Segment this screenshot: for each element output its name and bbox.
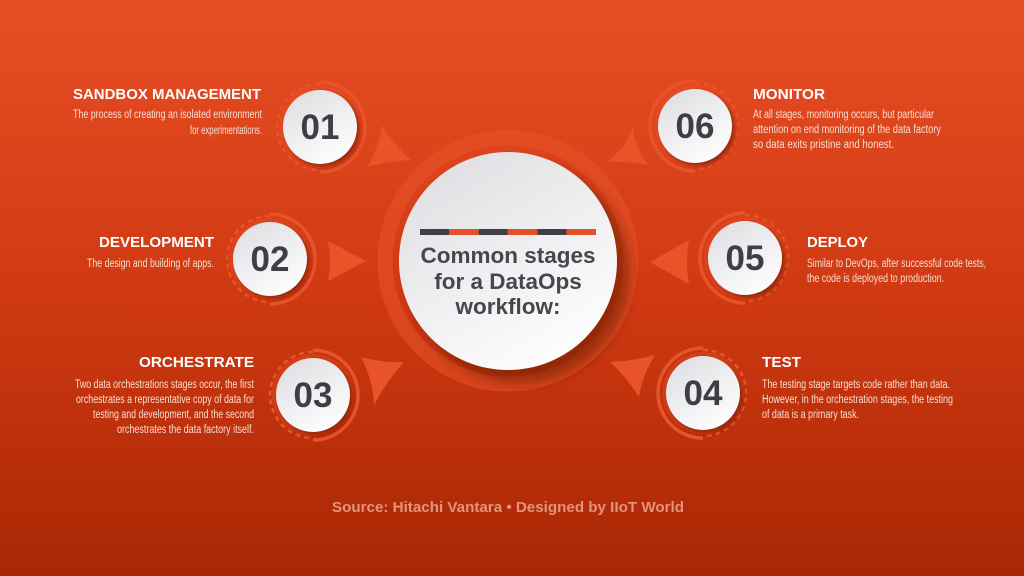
step 01: [73, 82, 365, 172]
hub title: workflow:: [454, 294, 560, 319]
heading 04: TEST: [762, 354, 801, 371]
description 04: of data is a primary task.: [762, 409, 859, 421]
step 02: [87, 214, 315, 304]
arrow 01: [367, 125, 411, 167]
hub title: for a DataOps: [434, 269, 582, 294]
description 03: orchestrates a representative copy of data for: [76, 394, 254, 406]
badge 01: 01: [301, 108, 339, 147]
heading 05: DEPLOY: [807, 234, 868, 251]
badge 05: [700, 213, 788, 303]
arrow 05: [650, 240, 689, 284]
description 06: so data exits pristine and honest.: [753, 139, 894, 151]
central hub: [385, 138, 631, 384]
description 03: testing and development, and the second: [93, 409, 254, 421]
source credit: Source: Hitachi Vantara • Designed by IIoT World: [332, 499, 684, 516]
badge 02: 02: [251, 240, 289, 279]
hub shadow: [410, 163, 630, 383]
arrow 02: [328, 241, 366, 281]
description 01: for experimentations.: [190, 125, 262, 137]
step 03: [75, 350, 358, 440]
heading 02: DEVELOPMENT: [99, 234, 214, 251]
arrow 06: [607, 125, 648, 165]
description 03: Two data orchestrations stages occur, the first: [75, 379, 255, 391]
hub outer ring: [385, 138, 631, 384]
hub disc: [399, 152, 617, 370]
step 04: [658, 348, 953, 438]
arrow 04: [610, 355, 655, 397]
hub divider bar: [420, 229, 596, 235]
badge 03: [270, 350, 358, 440]
badge 04: 04: [684, 374, 723, 413]
badge 02: [227, 214, 315, 304]
badge 05: 05: [726, 239, 764, 278]
hub title: Common stages: [420, 243, 596, 268]
heading 01: SANDBOX MANAGEMENT: [73, 86, 261, 103]
description 06: attention on end monitoring of the data factory: [753, 124, 941, 136]
description 03: orchestrates the data factory itself.: [117, 424, 254, 436]
description 06: At all stages, monitoring occurs, but particular: [753, 109, 934, 121]
badge 01: [277, 82, 365, 172]
description 05: the code is deployed to production.: [807, 273, 944, 285]
step 05: [700, 213, 986, 303]
badge 04: [658, 348, 746, 438]
badge 03: 03: [294, 376, 332, 415]
step 06: [650, 81, 941, 171]
description 02: The design and building of apps.: [87, 258, 214, 270]
description 04: However, in the orchestration stages, the testing: [762, 394, 953, 406]
heading 06: MONITOR: [753, 86, 825, 103]
description 01: The process of creating an isolated environment: [73, 109, 263, 121]
arrow 03: [361, 357, 404, 405]
heading 03: ORCHESTRATE: [139, 354, 254, 371]
description 04: The testing stage targets code rather than data.: [762, 379, 950, 391]
badge 06: 06: [676, 107, 714, 146]
badge 06: [650, 81, 738, 171]
